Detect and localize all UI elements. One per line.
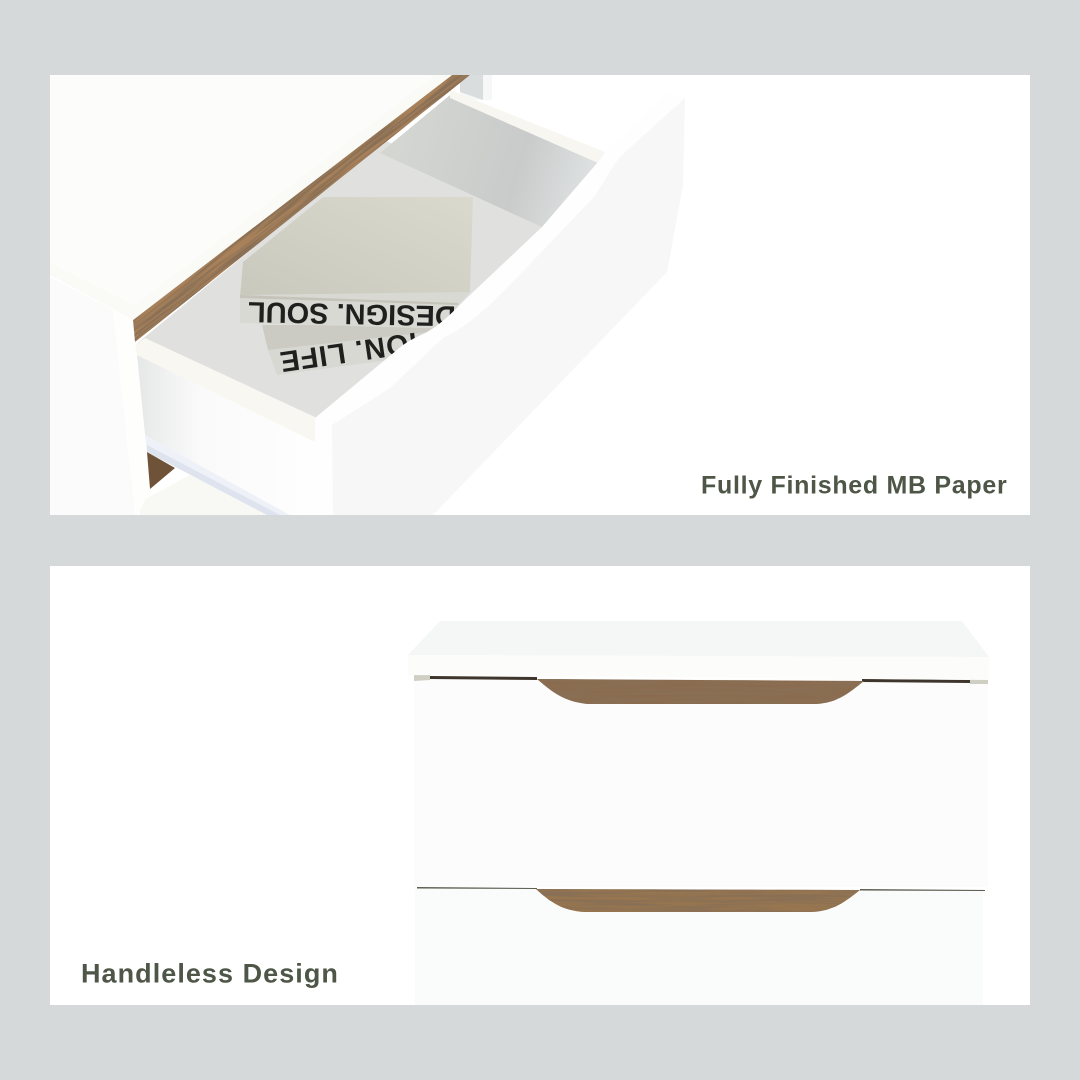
- caption: Fully Finished MB Paper: Fully Finished MB Paper: [701, 472, 1007, 500]
- cabinet top wood edge: [133, 75, 470, 342]
- cabinet side panel: [135, 344, 150, 488]
- cabinet top front edge: [50, 75, 452, 320]
- drawer back wall: [380, 95, 598, 227]
- drawer side wall: [137, 355, 190, 459]
- drawer gap line: [417, 887, 985, 891]
- gap below cabinet top: [414, 675, 988, 684]
- upper wood cut-out handle: [537, 679, 864, 704]
- drawer side rim: [135, 338, 317, 442]
- upper book: [240, 197, 473, 331]
- drawer slide rail: [145, 435, 290, 515]
- exposed wood edge under drawer: [147, 452, 175, 489]
- lower drawer below: [140, 475, 270, 515]
- drawer back rim: [450, 90, 605, 163]
- panel: top photo of open drawer: [50, 40, 1030, 515]
- upper drawer front: [414, 679, 988, 887]
- cabinet inner back: [460, 75, 492, 100]
- cabinet top slab: [408, 621, 989, 680]
- lower book: ION. LIFE: [277, 326, 420, 377]
- caption: Handleless Design: Handleless Design: [81, 958, 339, 988]
- cabinet top surface: [50, 75, 435, 305]
- panel: bottom photo of drawer fronts: [50, 566, 1030, 1005]
- book stack: [240, 197, 473, 377]
- upper book: DESIGN. SOUL: [248, 295, 456, 331]
- drawer front: [315, 93, 685, 515]
- lower wood cut-out handle: [536, 889, 860, 912]
- lower drawer front: [415, 889, 983, 1005]
- drawer floor: [135, 140, 560, 425]
